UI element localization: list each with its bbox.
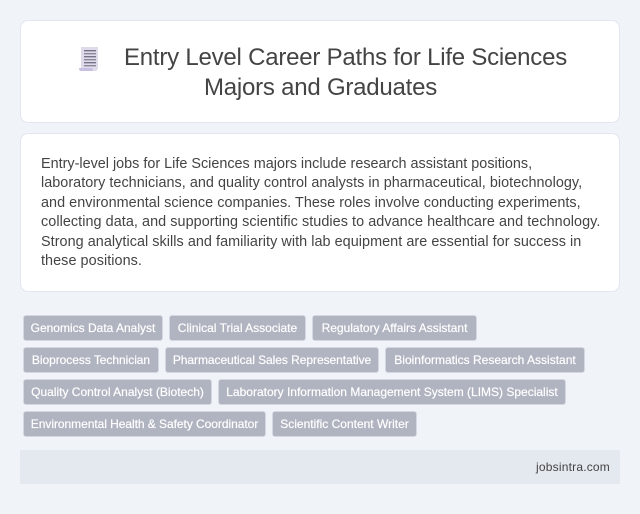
tag <box>23 411 266 437</box>
tag <box>23 347 159 373</box>
description text: laboratory technicians, and quality control analysts in pharmaceutical, biotechnology, <box>41 175 582 191</box>
tag: Quality Control Analyst (Biotech) <box>31 385 204 399</box>
tag: Bioinformatics Research Assistant <box>394 353 576 367</box>
tag: Regulatory Affairs Assistant <box>322 321 467 335</box>
tag: Bioprocess Technician <box>32 353 150 367</box>
tag <box>23 379 212 405</box>
tag <box>218 379 566 405</box>
footer bar <box>20 450 620 484</box>
tag: Scientific Content Writer <box>280 417 409 431</box>
description text: and environmental science companies. These roles involve conducting experiments, <box>41 195 581 211</box>
description text: these positions. <box>41 253 142 269</box>
tag: Pharmaceutical Sales Representative <box>173 353 371 367</box>
title <box>124 44 567 101</box>
tag <box>165 347 379 373</box>
description text: collecting data, and supporting scientific studies to advance healthcare and technology. <box>41 214 600 230</box>
tag <box>23 315 163 341</box>
description text: Entry-level jobs for Life Sciences majors include research assistant positions, <box>41 156 532 172</box>
panel: description <box>20 133 620 292</box>
tag <box>272 411 417 437</box>
description text: Strong analytical skills and familiarity with lab equipment are essential for success in <box>41 234 581 250</box>
icon: document scroll <box>79 47 98 71</box>
title: Majors and Graduates <box>204 74 437 101</box>
tag <box>169 315 306 341</box>
tag <box>312 315 477 341</box>
tag: Environmental Health & Safety Coordinator <box>31 417 258 431</box>
tag: Genomics Data Analyst <box>31 321 155 335</box>
panel: career tags <box>23 315 585 437</box>
title: Entry Level Career Paths for Life Sciences <box>124 44 567 71</box>
description text <box>41 156 600 269</box>
tag: Clinical Trial Associate <box>178 321 297 335</box>
tag: Laboratory Information Management System (LIMS) Specialist <box>226 385 558 399</box>
panel: title card <box>20 20 620 123</box>
tag <box>385 347 585 373</box>
footer source text: jobsintra.com <box>536 460 610 474</box>
